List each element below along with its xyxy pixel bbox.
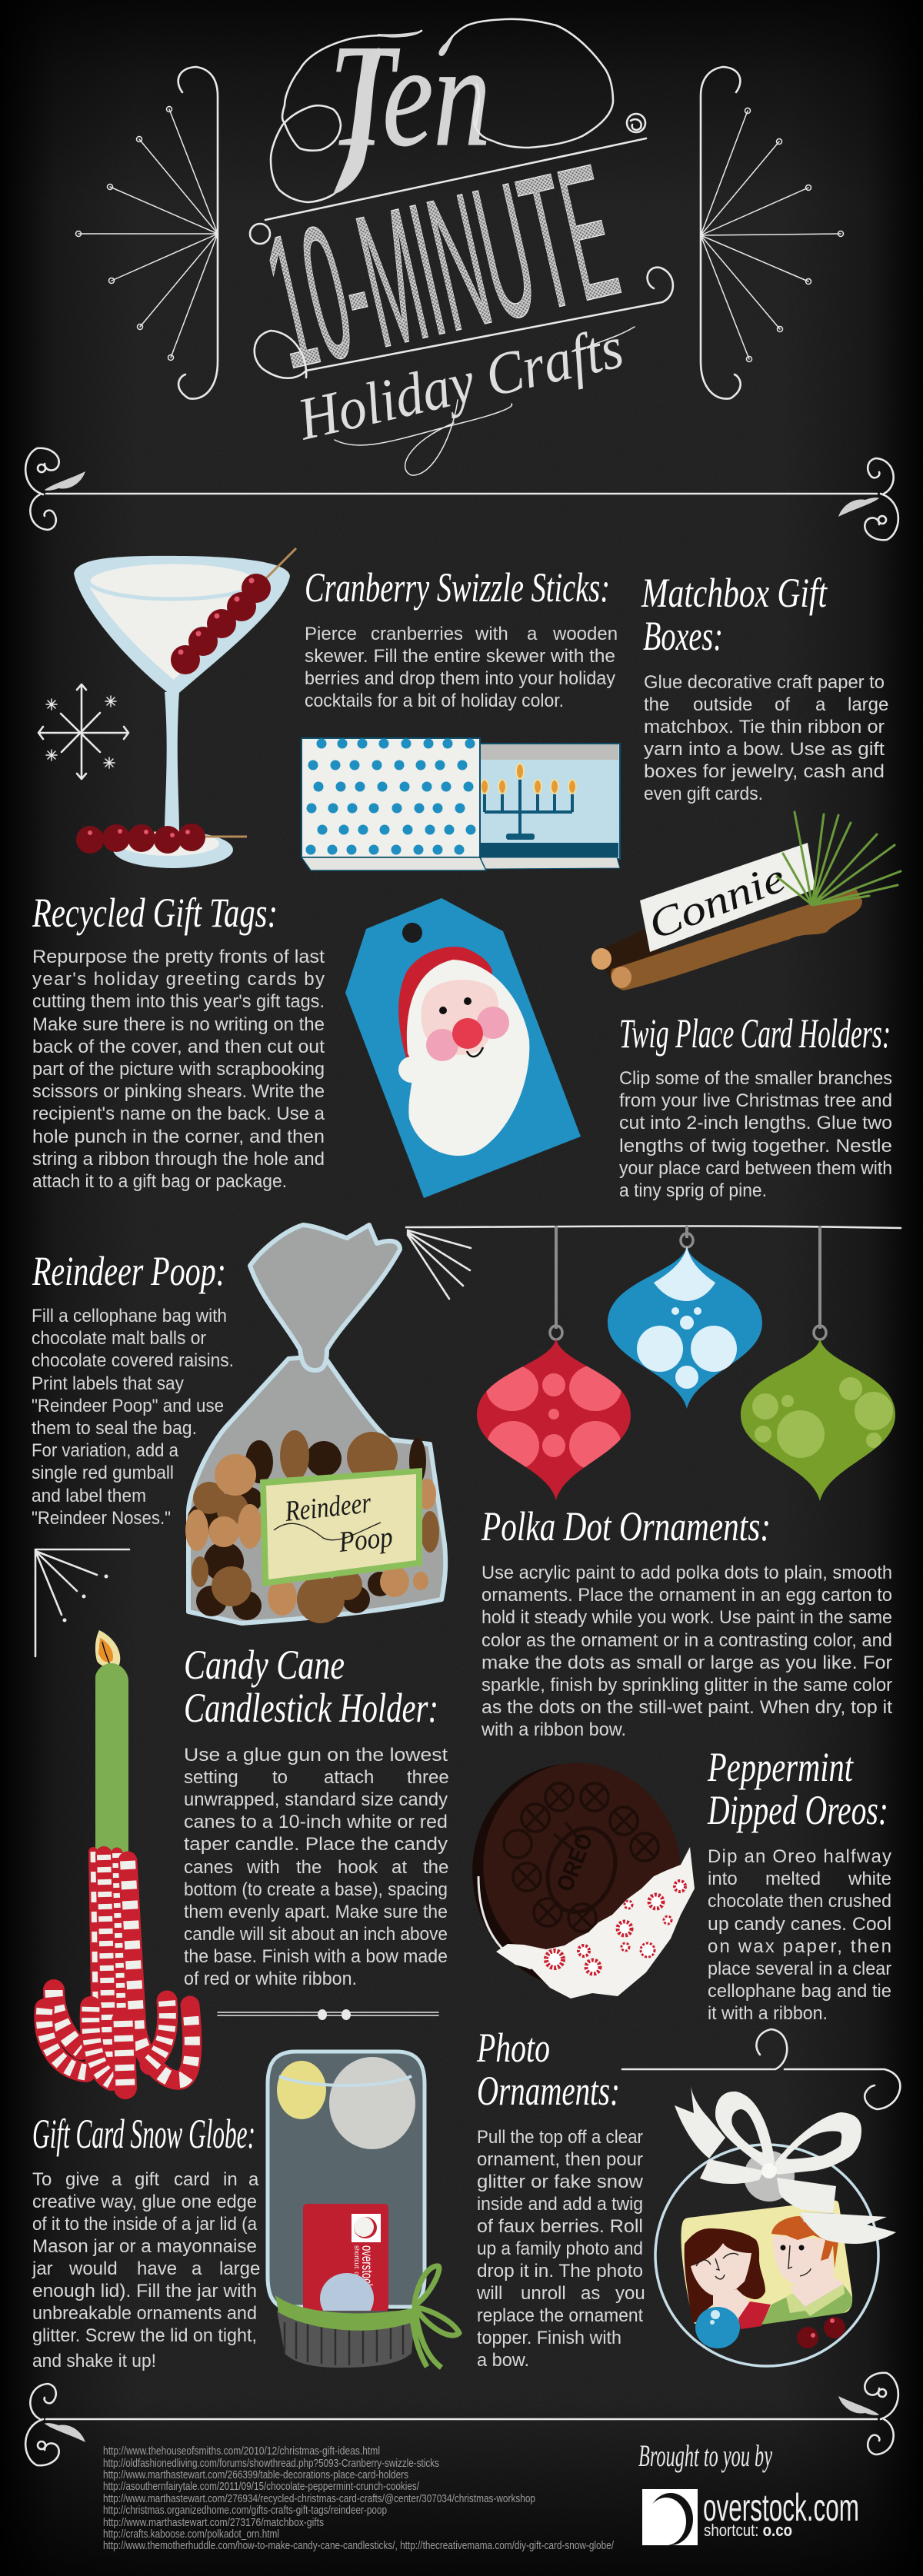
text block: yarn into a bow. Use as gift [644, 739, 885, 760]
text block: taper candle. Place the candy [184, 1834, 448, 1855]
cookie embossing [504, 1783, 658, 1932]
text block: inside and add a twig [477, 2194, 643, 2215]
text block: of it to the inside of a jar lid (a [32, 2214, 258, 2235]
text block: with a ribbon bow. [481, 1719, 626, 1740]
text block: Fill a cellophane bag with [32, 1306, 227, 1326]
text block [184, 1745, 449, 1989]
text block: Repurpose the pretty fronts of last [32, 947, 325, 967]
panel: candy cane candlestick holder [184, 1642, 449, 1989]
text block: "Reindeer Poop" and use [32, 1396, 224, 1416]
woman's face [691, 2243, 751, 2295]
candle [95, 1663, 128, 1853]
icon: cranberries on base [76, 824, 205, 854]
text block: canes [184, 1857, 233, 1878]
text block: chocolate malt balls or [32, 1328, 206, 1349]
heading: Matchbox Gift [641, 570, 828, 616]
icon: photo ornament [655, 2085, 896, 2366]
text block: outside [693, 694, 752, 715]
bag label: Poop [337, 1521, 395, 1559]
panel: gift card snow globe [32, 2052, 459, 2371]
text block: you [615, 2283, 645, 2304]
text block: Print labels that say [32, 1373, 184, 1394]
text block: of [775, 694, 790, 715]
text block: drop it in. The photo [477, 2261, 643, 2281]
text block: large [219, 2258, 260, 2279]
source list: http://crafts.kaboose.com/polkadot_orn.html [103, 2528, 279, 2541]
place card [640, 843, 815, 952]
left title bracket [75, 67, 218, 399]
icon: chalk snowflake [38, 684, 128, 779]
text block: and label them [32, 1486, 146, 1506]
gift card: shortcut: o.co [353, 2245, 361, 2284]
text block: part of the picture with scrapbooking [32, 1059, 325, 1080]
source list: http://www.marthastewart.com/276934/recycled-christmas-card-crafts/@center/307034/christmas-workshop [103, 2492, 535, 2505]
candies [185, 1430, 439, 1623]
text block: Clip some of the smaller branches [619, 1068, 892, 1089]
heading: Polka Dot Ornaments: [481, 1503, 771, 1549]
text block: hold it steady while you work. Use paint in the same [481, 1607, 892, 1628]
heading: Peppermint [707, 1744, 854, 1790]
text block: of faux berries. Roll [477, 2216, 643, 2237]
text block: chocolate covered raisins. [32, 1350, 234, 1371]
chalk twig accent [35, 1549, 129, 1656]
title word: Ten [271, 15, 645, 202]
candy canes [44, 1852, 192, 2088]
man's hair [771, 2216, 838, 2268]
text block: up candy canes. Cool [708, 1914, 891, 1935]
top divider with flourishes [25, 448, 898, 540]
text block: have [137, 2258, 177, 2279]
text block: skewer. Fill the entire skewer with the [305, 646, 615, 667]
text block: attach [324, 1767, 374, 1788]
text block: Pull the top off a clear [477, 2127, 643, 2148]
text block: a [192, 2258, 202, 2279]
text block: cranberries [371, 624, 463, 644]
text block: cocktails for a bit of holiday color. [305, 691, 564, 711]
text block: Glue decorative craft paper to [644, 672, 885, 693]
text block [32, 2169, 260, 2371]
icon: dipped oreo [448, 1742, 704, 2011]
man's neck [791, 2278, 844, 2307]
text block: at [392, 1857, 407, 1878]
panel: photo ornaments [476, 2025, 900, 2371]
woman's hair [685, 2228, 765, 2322]
text block: three [407, 1767, 449, 1788]
jar lid [277, 2311, 415, 2368]
heading: Gift Card Snow Globe: [32, 2111, 255, 2157]
text block: will [476, 2283, 502, 2304]
panel: peppermint dipped oreos [707, 1744, 891, 2024]
title words: Holiday Crafts: Holiday Crafts [291, 313, 629, 453]
family photo [681, 2201, 852, 2329]
text block: would [68, 2258, 118, 2279]
text block: To [32, 2169, 52, 2190]
text block: ornaments. Place the ornament in an egg carton to [481, 1585, 892, 1606]
ribbon bow [675, 2085, 896, 2244]
cookie [448, 1742, 704, 2011]
text block: back of the cover, and then cut out [32, 1037, 325, 1057]
text block: wooden [552, 624, 618, 644]
text block: jar [32, 2258, 53, 2279]
woman's neck [713, 2289, 750, 2318]
text block: glitter. Screw the lid on tight, [32, 2325, 257, 2346]
heading: Cranberry Swizzle Sticks: [305, 564, 610, 611]
text block: cellophane bag and tie [708, 1981, 891, 2002]
man's shirt [761, 2286, 852, 2325]
source list: http://www.marthastewart.com/273176/matchbox-gifts [103, 2516, 324, 2529]
source list: http://asouthernfairytale.com/2011/09/15/chocolate-peppermint-crunch-cookies/ [103, 2480, 420, 2493]
text block: hole punch in the corner, and then [32, 1127, 325, 1147]
text block: them to seal the bag. [32, 1418, 197, 1439]
text block [644, 672, 888, 804]
text block: candle will sit about an inch above [184, 1924, 448, 1945]
source list: http://www.marthastewart.com/266399/table-decorations-place-card-holders [103, 2468, 408, 2481]
place card: Connie [642, 854, 791, 948]
text block: chocolate then crushed [708, 1891, 891, 1912]
text block: lengths of twig together. Nestle [619, 1136, 892, 1157]
text block: bottom (to create a base), spacing [184, 1879, 448, 1900]
text block: year's holiday greeting cards by [32, 969, 325, 990]
matchbox lid [302, 738, 486, 870]
santa beard [407, 960, 529, 1156]
ornament: green [741, 1326, 895, 1501]
text block: sparkle, finish by sprinkling glitter in the same color [481, 1675, 892, 1696]
heading [184, 1642, 438, 1731]
text block: "Reindeer Noses." [32, 1508, 171, 1529]
icon: cranberries on skewer in glass [171, 574, 271, 674]
matchbox tray [477, 744, 620, 869]
gift card: overstock.com [358, 2245, 375, 2311]
text block: with [475, 624, 508, 644]
panel: cranberry swizzle sticks [74, 548, 618, 868]
text block: topper. Finish with [477, 2328, 621, 2348]
heading [641, 570, 828, 659]
text block: creative way, glue one edge [32, 2192, 257, 2212]
ornament balls [695, 2307, 845, 2348]
text block: on wax paper, then [708, 1936, 891, 1957]
text block: berries and drop them into your holiday [305, 668, 615, 689]
text block: a [527, 624, 538, 644]
text block: the [296, 1857, 322, 1878]
heading: Photo [476, 2025, 550, 2071]
text block: Use a glue gun on the lowest [184, 1745, 448, 1766]
panel: recycled gift tags [32, 890, 581, 1198]
text block: white [848, 1869, 891, 1889]
text block: it with a ribbon. [708, 2003, 828, 2024]
text block: hook [338, 1857, 378, 1878]
text block: the [644, 694, 669, 715]
ornament outline [655, 2145, 878, 2366]
gift card [303, 2204, 388, 2311]
icon: candy cane candlestick [44, 1630, 192, 2088]
chalk branch with ornaments [406, 1226, 901, 1501]
icon: matchbox with menorah [302, 738, 620, 870]
small chalk divider [218, 2009, 438, 2020]
right title bracket [701, 67, 843, 399]
text block: replace the ornament [477, 2305, 643, 2326]
heading: Candlestick Holder: [184, 1685, 438, 1731]
ornament: red [477, 1326, 631, 1500]
text block: place several in a clear [708, 1959, 891, 1979]
title word: 10-MINUTE [249, 123, 673, 409]
flame [95, 1630, 120, 1667]
chalk swirl [622, 2029, 900, 2109]
credit: brought to you by: Brought to you by [638, 2438, 772, 2473]
text block: large [848, 694, 888, 715]
text block: from your live Christmas tree and [619, 1090, 892, 1111]
title word: Ten: Ten [329, 15, 491, 177]
text block: matchbox. Tie thin ribbon or [644, 717, 885, 737]
text block: unroll [521, 2283, 566, 2304]
text block: unbreakable ornaments and [32, 2303, 257, 2324]
glitter discs [277, 2061, 326, 2119]
text block [32, 947, 325, 1192]
santa face [422, 980, 498, 1055]
bag label [260, 1468, 422, 1586]
text block: Make sure there is no writing on the [32, 1014, 325, 1035]
text block: gift [135, 2169, 159, 2190]
panel: polka dot ornaments [481, 1503, 892, 1740]
text block: recipient's name on the back. Use a [32, 1103, 325, 1124]
source list: http://oldfashionedliving.com/forums/showthread.php?5093-Cranberry-swizzle-sticks [103, 2457, 439, 2470]
white chocolate [496, 1847, 695, 1999]
icon: mason jar snow globe [268, 2052, 459, 2368]
text block: into [708, 1869, 738, 1889]
heading [476, 2025, 620, 2114]
text block: as [581, 2283, 600, 2304]
peppermint bits [546, 1881, 685, 1974]
text block: give [65, 2169, 99, 2190]
text block: Use acrylic paint to add polka dots to plain, smooth [481, 1563, 892, 1583]
text block: the [423, 1857, 448, 1878]
text block: even gift cards. [644, 784, 763, 804]
text block: unwrapped, standard size candy [184, 1789, 448, 1810]
text block: as the dots on the still-wet paint. When dry, top it [481, 1697, 892, 1718]
text block: of red or white ribbon. [184, 1969, 357, 1989]
source list: http://www.thehouseofsmiths.com/2010/12/christmas-gift-ideas.html [103, 2445, 380, 2458]
heading: Recycled Gift Tags: [32, 890, 278, 936]
panel: reindeer poop [32, 1225, 445, 1623]
text block: color as the ornament or in a contrasting color, and [481, 1630, 892, 1651]
text block: your place card between them with [619, 1158, 892, 1179]
text block: a [815, 694, 826, 715]
text block: Dip an Oreo halfway [708, 1846, 891, 1867]
text block [708, 1846, 891, 2024]
icon: santa gift tag [345, 898, 581, 1198]
text block: glitter or fake snow [477, 2172, 644, 2192]
icon: dipped oreo: OREO [552, 1830, 598, 1895]
text block: card [174, 2169, 210, 2190]
text block: attach it to a gift bag or package. [32, 1171, 287, 1192]
text block: a [112, 2169, 122, 2190]
text block: with [246, 1857, 280, 1878]
text block [476, 2127, 645, 2371]
text block: a bow. [477, 2350, 529, 2371]
heading: Ornaments: [477, 2068, 620, 2114]
text block: Mason jar or a mayonnaise [32, 2236, 257, 2257]
panel: matchbox gift boxes [641, 570, 888, 804]
bag label: Reindeer [283, 1486, 372, 1528]
text block: cut into 2-inch lengths. Glue two [619, 1113, 892, 1133]
text block: in [223, 2169, 238, 2190]
pine sprig [777, 812, 901, 905]
text block: the base. Finish with a bow made [184, 1946, 448, 1967]
santa hat [398, 947, 492, 1069]
text block: them evenly apart. Make sure the [184, 1902, 448, 1922]
text block: Pierce [305, 624, 357, 644]
icon: cellophane bag [185, 1225, 445, 1623]
text block: ornament, then pour [477, 2149, 643, 2170]
text block: For variation, add a [32, 1440, 179, 1461]
logo: overstock.com: shortcut: o.co [704, 2521, 792, 2540]
source list [103, 2445, 615, 2552]
text block [305, 624, 618, 711]
ornament: blue [608, 1233, 762, 1409]
text block: a [248, 2169, 259, 2190]
text block: scissors or pinking shears. Write the [32, 1081, 325, 1102]
title block [249, 15, 673, 475]
bottom divider with flourishes [25, 2373, 898, 2465]
text block: cutting them into this year's gift tags. [32, 991, 325, 1012]
heading [707, 1744, 888, 1833]
icon: twig place card [591, 812, 901, 990]
text block [481, 1563, 892, 1740]
man's face [773, 2235, 835, 2286]
text block: string a ribbon through the hole and [32, 1149, 325, 1170]
logo: overstock.com [642, 2486, 859, 2545]
heading: Boxes: [643, 613, 723, 659]
text block: single red gumball [32, 1463, 174, 1483]
icon: martini glass [74, 548, 296, 868]
source list: http://christmas.organizedhome.com/gifts-crafts-gift-tags/reindeer-poop [103, 2504, 387, 2517]
text block: to [272, 1767, 288, 1788]
text block: a tiny sprig of pine. [619, 1180, 767, 1201]
text block: melted [765, 1869, 821, 1889]
text block: make the dots as small or large as you like. For [481, 1652, 892, 1673]
heading: Candy Cane [184, 1642, 345, 1688]
panel: twig place card holders [619, 1010, 892, 1201]
heading: Reindeer Poop: [32, 1248, 226, 1294]
text block: up a family photo and [477, 2238, 643, 2259]
text block [32, 1306, 234, 1529]
text block: and shake it up! [32, 2351, 156, 2371]
text block: setting [184, 1767, 238, 1788]
text block [619, 1068, 892, 1201]
twigs [591, 889, 862, 990]
text block: enough lid). Fill the jar with [32, 2281, 257, 2301]
text block: canes to a 10-inch white or red [184, 1812, 448, 1832]
text block: boxes for jewelry, cash and [644, 761, 885, 782]
source list: http://www.themotherhuddle.com/how-to-make-candy-cane-candlesticks/, http://thecreativemama.com/diy-gift-card-snow-globe/ [103, 2539, 615, 2552]
green ribbon [275, 2295, 419, 2331]
jar glass [268, 2052, 425, 2307]
